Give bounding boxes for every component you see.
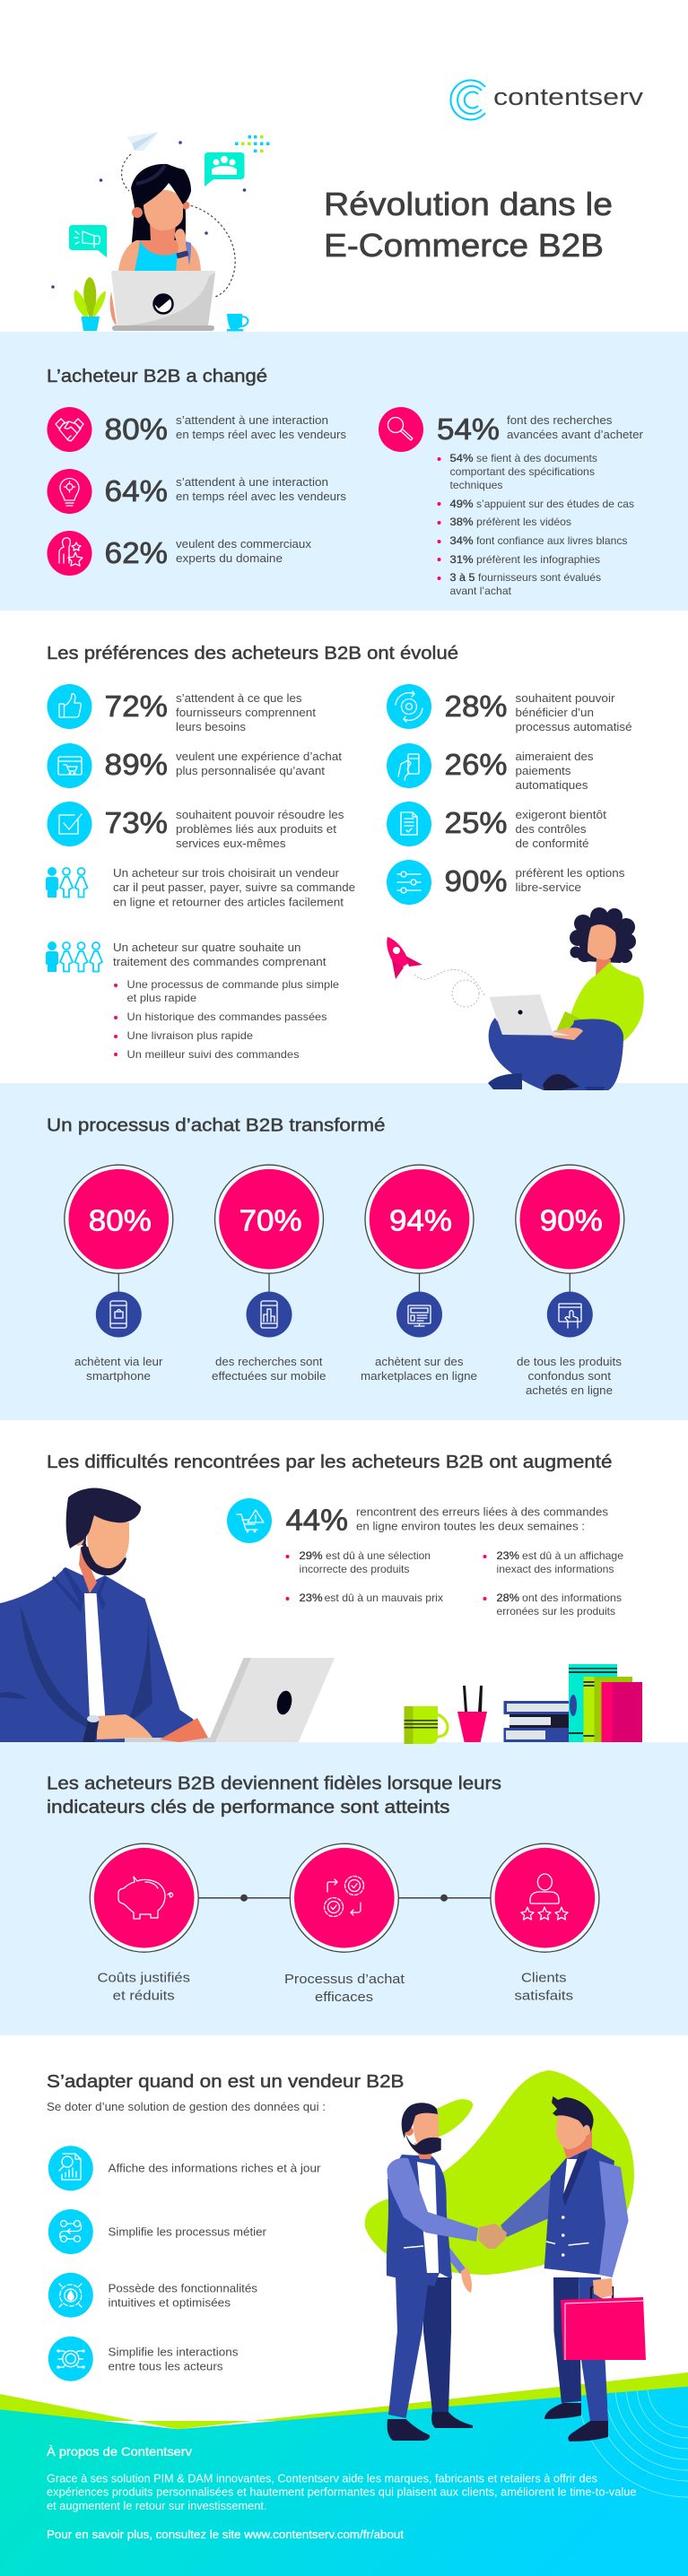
stat: 28%: souhaitent pouvoir (515, 691, 615, 705)
title: E-Commerce B2B (324, 227, 604, 264)
stat circle: 70% mobile: effectuées sur mobile (212, 1369, 327, 1383)
bullet list: incorrecte des produits (300, 1563, 409, 1575)
icon: one in four buyers (46, 941, 102, 972)
icon: paper plane (126, 132, 159, 151)
bullet list: 49% (450, 498, 474, 510)
bullet list: 54% (450, 452, 474, 464)
stat: 44% with bullets: rencontrent des erreurs liées à des commandes (356, 1505, 609, 1519)
feature: fonctionnalités: intuitives et optimisées (108, 2295, 231, 2310)
illustration: woman with laptop (488, 907, 644, 1090)
stat: 72%: s’attendent à ce que les (176, 691, 302, 705)
stat: 73%: souhaitent pouvoir résoudre les (176, 808, 344, 821)
bullet list: est dû à un affichage (522, 1549, 623, 1562)
stat: 54% with bullet list: avancées avant d’acheter (507, 428, 644, 441)
bullet list: 23% (497, 1549, 519, 1562)
stat: 26%: aimeraient des (515, 750, 594, 763)
panel backgrounds (0, 332, 688, 2035)
stat: 90%: 90% (445, 864, 508, 898)
stat: 44% with bullets (227, 1498, 623, 1618)
stat: 72%: 72% (104, 690, 168, 723)
stat: 64% (47, 469, 347, 514)
feature: processus métier (48, 2209, 267, 2254)
illustration: man at laptop (0, 1487, 335, 1742)
heading: S'adapter: S’adapter quand on est un vendeur B2B (47, 2071, 404, 2092)
bullet list: 29% (300, 1549, 323, 1562)
stat: 80%: en temps réel avec les vendeurs (176, 428, 347, 441)
stat: 73%: 73% (104, 806, 168, 839)
bullet list: 34% (450, 534, 474, 547)
about Contentserv: Pour en savoir plus, consultez le site www.contentserv.com/fr/about (47, 2528, 405, 2541)
stat: 54% with bullet list (379, 407, 644, 597)
bullet list: Un meilleur suivi des commandes (127, 1048, 300, 1061)
text: un acheteur sur trois: en ligne et retourner des articles facilement (113, 895, 344, 909)
stat: 62% (47, 531, 312, 576)
bullet list: 3 à 5 (450, 571, 475, 584)
about Contentserv (47, 2444, 637, 2541)
logo: contentserv (450, 81, 644, 120)
KPI: clients satisfaits: Clients (521, 1971, 567, 1985)
title (324, 186, 613, 264)
stat circle: 70% mobile: 70% (239, 1204, 302, 1237)
KPI: clients satisfaits: satisfaits (515, 1989, 573, 2003)
bullet list: s’appuient sur des études de cas (476, 498, 634, 510)
KPI: coûts justifiés (90, 1843, 198, 2003)
bullet list: techniques (450, 479, 502, 491)
bullet list: inexact des informations (497, 1563, 614, 1575)
stat circle: 70% mobile: des recherches sont (215, 1355, 323, 1368)
stat: 73%: problèmes liés aux produits et (176, 822, 336, 836)
illustration: woman at laptop (51, 132, 270, 332)
KPI: processus d'achat: efficaces (315, 1990, 373, 2005)
icon: magnifier (388, 418, 413, 440)
heading: Les préférences: Les préférences des acheteurs B2B ont évolué (47, 643, 458, 664)
text: un acheteur sur quatre: Un acheteur sur quatre souhaite un (113, 941, 301, 954)
subheading: Se doter d’une solution de gestion des données qui : (47, 2100, 326, 2113)
icon: one in three buyers (46, 867, 88, 898)
about Contentserv: expériences produits personnalisées et hautement performantes qui plaisent aux clients, améliorent le time-to-value (47, 2485, 637, 2498)
stat: 90% (387, 860, 625, 905)
KPI: processus d'achat: Processus d’achat (284, 1972, 405, 1987)
heading: Les acheteurs fidèles: Les acheteurs B2B deviennent fidèles lorsque leurs (47, 1774, 501, 1793)
stat circle: 70% mobile (212, 1165, 327, 1383)
KPI: coûts justifiés: Coûts justifiés (97, 1971, 190, 1985)
coffee cup (227, 314, 248, 332)
bullet list: erronées sur les produits (497, 1605, 615, 1618)
bullet list (285, 1549, 623, 1618)
stat circle: 90% online: 90% (540, 1204, 603, 1237)
stat circle: 80% smartphone: achètent via leur (74, 1355, 163, 1368)
stat: 25%: des contrôles (515, 822, 587, 836)
bullet list: fournisseurs sont évalués (478, 571, 601, 584)
feature: fonctionnalités: Possède des fonctionnalités (108, 2281, 258, 2295)
illustration: briefcase (561, 2278, 646, 2360)
stat: 62%: experts du domaine (176, 551, 283, 565)
stat: 26%: automatiques (515, 778, 588, 792)
stat: 89%: plus personnalisée qu’avant (176, 764, 325, 777)
stat: 80%: 80% (104, 412, 168, 446)
heading: L'acheteur B2B a changé: L’acheteur B2B a changé (47, 366, 267, 386)
KPI: coûts justifiés: et réduits (113, 1989, 175, 2003)
stat: 62%: veulent des commerciaux (176, 537, 312, 551)
illustration: mug (404, 1706, 448, 1744)
illustration: handshake blob (365, 2070, 634, 2275)
stat circle: 90% online: confondus sont (527, 1369, 611, 1383)
stat: 73%: services eux-mêmes (176, 837, 286, 850)
stat: 28%: bénéficier d’un (515, 706, 594, 719)
bullet list (438, 452, 634, 597)
bullet list: préfèrent les vidéos (476, 516, 571, 528)
heading: Les difficultés: Les difficultés rencontrées par les acheteurs B2B ont augmenté (47, 1452, 612, 1472)
stat: 90%: préfèrent les options (515, 866, 625, 880)
title: Révolution dans le (324, 186, 613, 222)
bullet list: ont des informations (522, 1592, 622, 1604)
stat circle: 94% marketplaces (361, 1165, 477, 1383)
icon: person with stars (521, 1874, 568, 1920)
bullet list: avant l’achat (450, 585, 512, 597)
stat: 28%: processus automatisé (515, 720, 631, 733)
stat: 64%: en temps réel avec les vendeurs (176, 490, 347, 503)
about Contentserv: À propos de Contentserv (47, 2444, 192, 2459)
stat: 90%: libre-service (515, 880, 581, 894)
woman figure (118, 164, 201, 271)
stat: 26% (387, 743, 594, 792)
stat: 72% (47, 684, 316, 733)
bullet list: 23% (300, 1592, 323, 1604)
stat: 26%: paiements (515, 764, 571, 777)
stat: 44% with bullets: 44% (285, 1503, 348, 1537)
stat: 72%: fournisseurs comprennent (176, 706, 316, 719)
icon: speech bubble with people (205, 152, 244, 186)
bullet list: Une processus de commande plus simple (127, 978, 339, 991)
stat circle: 80% smartphone: 80% (89, 1204, 152, 1237)
stat: 25% (387, 802, 606, 850)
stat: 64%: s’attendent à une interaction (176, 475, 328, 489)
illustration: man with beard (387, 2103, 478, 2441)
stat: 80% (47, 407, 347, 452)
stat circle: 94% marketplaces: marketplaces en ligne (361, 1369, 477, 1383)
about Contentserv: Grace à ses solution PIM & DAM innovantes, Contentserv aide les marques, fabricants et retailers à offrir des (47, 2473, 597, 2485)
KPI: processus d'achat (284, 1843, 405, 2005)
text: un acheteur sur trois: car il peut passer, payer, suivre sa commande (113, 880, 355, 894)
stat circle: 90% online: achetés en ligne (526, 1383, 613, 1397)
feature: interactions: entre tous les acteurs (108, 2360, 223, 2372)
stat: 72%: leurs besoins (176, 720, 246, 733)
icon: speech bubble with megaphone (69, 225, 107, 257)
heading: Un processus d'achat: Un processus d’achat B2B transformé (47, 1115, 386, 1135)
stat: 25%: de conformité (515, 837, 588, 850)
stat: 64%: 64% (104, 474, 168, 507)
connector line (198, 1895, 491, 1902)
stat circle: 94% marketplaces: achètent sur des (375, 1355, 464, 1368)
feature: informations riches (48, 2146, 321, 2190)
bullet list: est dû à une sélection (326, 1549, 431, 1562)
bullet list: 28% (497, 1592, 519, 1604)
KPI: clients satisfaits (491, 1843, 599, 2003)
bullet list: Un historique des commandes passées (127, 1010, 327, 1023)
illustration: handshake (478, 2224, 507, 2249)
icon: gears (325, 1876, 364, 1917)
stat: 26%: 26% (445, 748, 508, 781)
stat circle: 90% online: de tous les produits (517, 1355, 623, 1368)
bullet list: 31% (450, 553, 474, 566)
stat: 89% (47, 743, 342, 788)
stat: 62%: 62% (104, 536, 168, 569)
bullet list: se fient à des documents (476, 452, 597, 464)
stat circle: 80% smartphone: smartphone (86, 1369, 151, 1383)
laptop (110, 271, 215, 331)
text: un acheteur sur quatre: traitement des commandes comprenant (113, 955, 327, 968)
stat circle: 80% smartphone (65, 1165, 173, 1383)
footer colour bands (0, 2372, 688, 2576)
stat: 54% with bullet list: 54% (437, 412, 500, 446)
stat: 25%: exigeront bientôt (515, 808, 606, 821)
stat: 25%: 25% (445, 806, 508, 839)
stat: 28% (387, 684, 631, 733)
bullet list: et plus rapide (127, 992, 196, 1004)
stat: 80%: s’attendent à une interaction (176, 413, 328, 427)
illustration: man with briefcase (501, 2096, 629, 2442)
feature: interactions (48, 2337, 239, 2381)
illustration: books (504, 1664, 642, 1742)
about Contentserv: et augmentent le retour sur investissement. (47, 2500, 267, 2512)
icon: rocket (387, 937, 484, 1007)
stat: 89%: veulent une expérience d’achat (176, 750, 342, 763)
feature: interactions: Simplifie les interactions (108, 2346, 239, 2358)
illustration: pen cup (457, 1686, 487, 1742)
stat circle: 94% marketplaces: 94% (389, 1204, 452, 1237)
bullet list: Une livraison plus rapide (127, 1029, 253, 1042)
icon: piggy bank (118, 1877, 173, 1919)
heading: Les acheteurs fidèles (47, 1774, 501, 1817)
bullet list: comportant des spécifications (450, 465, 595, 478)
heading: Les acheteurs fidèles: indicateurs clés de performance sont atteints (47, 1797, 449, 1817)
feature: informations riches: Affiche des informations riches et à jour (108, 2161, 321, 2175)
bullet list: est dû à un mauvais prix (325, 1592, 443, 1604)
stat: 89%: 89% (104, 748, 168, 781)
bullet list: 38% (450, 516, 474, 528)
feature: processus métier: Simplifie les processus métier (108, 2225, 267, 2238)
text: un acheteur sur trois (113, 866, 355, 909)
stat: 73% (47, 802, 344, 850)
plant (74, 277, 106, 331)
stat: 44% with bullets: en ligne environ toutes les deux semaines : (356, 1519, 585, 1533)
bullet list: font confiance aux livres blancs (476, 534, 628, 547)
stat: 54% with bullet list: font des recherches (507, 413, 613, 427)
feature: fonctionnalités (48, 2273, 258, 2318)
icon: cart warning (237, 1510, 264, 1532)
stat circle: 90% online (516, 1165, 624, 1397)
logo: contentserv: contentserv (493, 83, 644, 110)
text: un acheteur sur trois: Un acheteur sur trois choisirait un vendeur (113, 866, 340, 880)
text: un acheteur sur quatre (113, 941, 339, 1061)
decorative pixel dots (235, 135, 269, 152)
bullet list (114, 978, 339, 1061)
stat: 28%: 28% (445, 690, 508, 723)
bullet list: préfèrent les infographies (476, 553, 600, 566)
